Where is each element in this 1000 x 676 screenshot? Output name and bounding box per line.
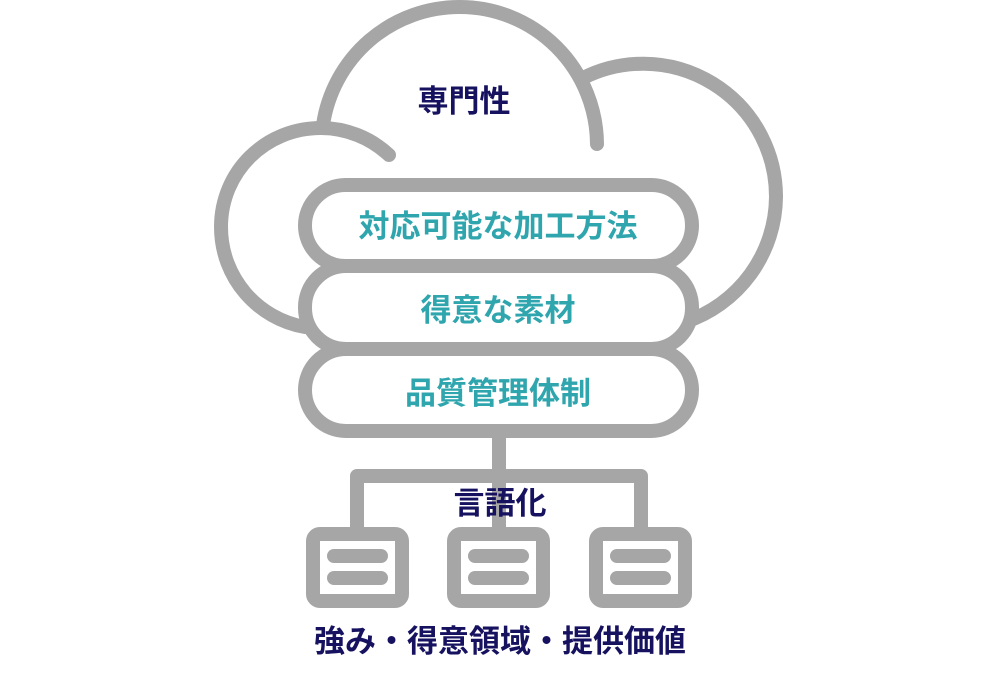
label: machining methods: 対応可能な加工方法 <box>358 209 638 244</box>
caption: strengths, specialties, value: 強み・得意領域・提供価値 <box>314 624 686 659</box>
pill: machining methods <box>305 185 692 266</box>
label: materials: 得意な素材 <box>420 293 576 328</box>
panel: layer stack <box>305 185 692 431</box>
label: quality system: 品質管理体制 <box>405 376 591 411</box>
heading: verbalization: 言語化 <box>454 486 546 521</box>
icon: cloud outline <box>221 7 776 327</box>
pill: materials <box>305 266 692 349</box>
connector: tree lines <box>357 431 641 530</box>
heading: expertise: 専門性 <box>418 84 510 119</box>
icon: document box centre <box>454 534 543 601</box>
icon: document box right <box>596 534 685 601</box>
icon: document box left <box>313 534 402 601</box>
pill: quality system <box>305 349 692 431</box>
